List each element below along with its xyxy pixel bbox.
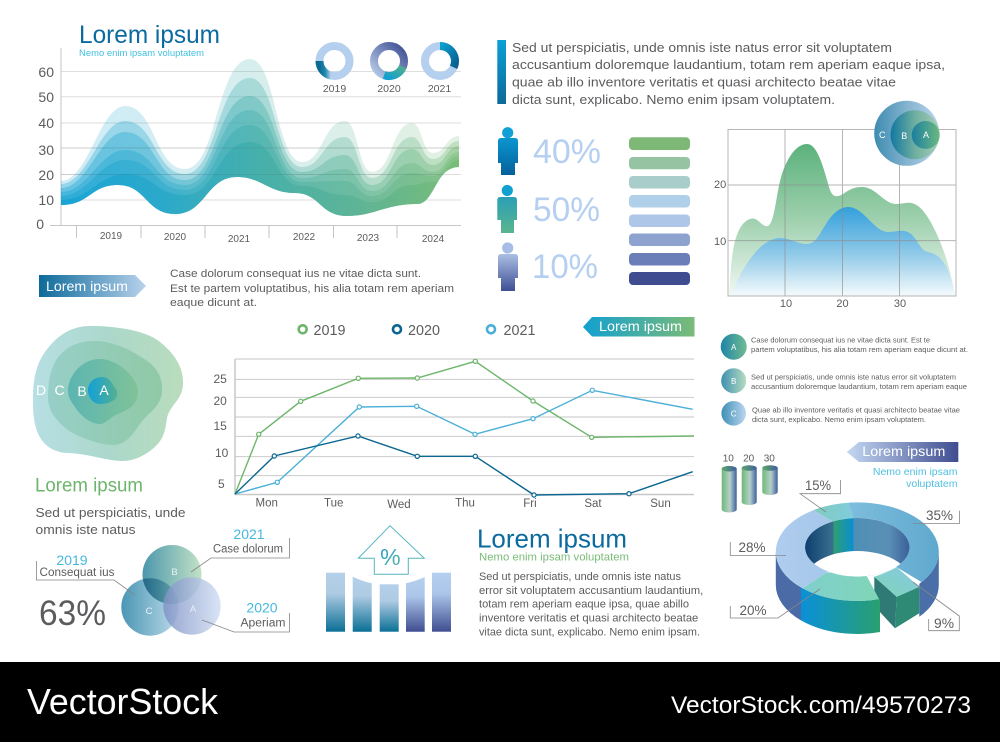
legend: 2021: [504, 323, 536, 339]
panel: line chart: [214, 323, 694, 511]
text block: bottom centre: [477, 523, 703, 639]
donut percent labels: 35%: [926, 507, 953, 523]
donut 2020: 2020: [377, 83, 401, 95]
label 2020: [240, 600, 286, 630]
item B: B: [731, 377, 736, 386]
venn letters: [146, 567, 197, 617]
panel: wave chart: [36, 48, 461, 245]
legend: 2019: [314, 323, 346, 339]
y labels: 20: [214, 394, 227, 408]
item B: accusantium doloremque laudantium, totam rem aperiam eaque: [751, 382, 967, 391]
panel: A B C list: [721, 334, 968, 426]
text block: top right paragraph: quae ab illo inventore veritatis et quasi architecto beatae vitae: [512, 74, 896, 90]
cylinder 30: 30: [764, 454, 775, 465]
arrow tag: middle Lorem ipsum: [583, 317, 694, 336]
text block: top right paragraph: dicta sunt, explicabo. Nemo enim ipsam voluptatem.: [512, 92, 835, 107]
label 2020: 2020: [246, 600, 278, 616]
arrow with percent: %: [380, 544, 401, 570]
label 2019: Consequat ius: [40, 567, 115, 579]
nested circles A B C: C: [879, 130, 886, 140]
ring top segments: [776, 502, 939, 601]
text: right subtitle: voluptatem: [906, 478, 958, 490]
item B: Sed ut perspiciatis, unde omnis iste natus error sit voluptatem: [751, 372, 956, 381]
area chart axis labels: [714, 179, 906, 310]
text block: case dolorum: [170, 268, 454, 309]
text block: case dolorum: Est te partem voluptatibus, his alia totam rem aperiam: [170, 283, 454, 295]
panel: cylinders: [722, 454, 778, 512]
day labels: [256, 498, 671, 511]
item A: partem voluptatibus, his alia totam rem aperiam eaque dicunt at.: [751, 345, 968, 354]
text block: bottom centre: Lorem ipsum: [477, 523, 627, 553]
chart grid and axes: [50, 48, 461, 238]
day labels: Tue: [324, 498, 343, 510]
day labels: Sun: [650, 498, 671, 510]
person 50%: [497, 185, 600, 233]
label 2021: Case dolorum: [213, 544, 283, 556]
donut 2019: 2019: [323, 83, 346, 95]
text block: green heading: Lorem ipsum: [35, 476, 143, 496]
y axis labels: 40: [38, 115, 54, 131]
blue area: [731, 207, 955, 296]
panel: percent bar chart: [326, 526, 451, 632]
area chart axis labels: 20: [714, 179, 726, 191]
blob labels: [36, 382, 109, 399]
text block: top right paragraph: accusantium doloremque laudantium, totam rem aperiam eaque ipsa,: [512, 57, 945, 72]
y axis labels: [36, 64, 54, 232]
segment 9 top: [874, 567, 919, 597]
arrow tag: left Lorem ipsum: Lorem ipsum: [46, 279, 128, 294]
text block: case dolorum: Case dolorum consequat ius ne vitae dicta sunt.: [170, 268, 421, 280]
venn leader lines: [36, 538, 290, 632]
day labels: Fri: [523, 498, 537, 510]
label 2020: Aperiam: [240, 618, 286, 630]
series 2019: [235, 359, 694, 494]
y labels: 5: [218, 477, 225, 491]
donut percent labels: 15%: [805, 477, 831, 493]
venn circles: [121, 545, 221, 636]
segment 9 faces: [874, 577, 919, 628]
text block: top right paragraph: [497, 40, 945, 107]
day labels: Mon: [256, 498, 278, 510]
x axis years: 2022: [293, 232, 316, 243]
person 10%: 10%: [532, 248, 598, 286]
item C: dicta sunt, explicabo. Nemo enim ipsam voluptatem.: [752, 415, 926, 424]
donut percent labels: 28%: [738, 539, 766, 555]
day labels: Thu: [455, 498, 475, 510]
x axis years: [100, 231, 445, 245]
label 2021: [213, 526, 283, 556]
cylinder 10: 10: [723, 454, 734, 465]
item A: Case dolorum consequat ius ne vitae dicta sunt. Est te: [751, 336, 930, 345]
blob level A: [88, 377, 117, 404]
y axis labels: 10: [38, 192, 54, 208]
y labels: [214, 372, 229, 491]
item C: [721, 401, 960, 426]
green area: [729, 144, 955, 296]
panel: venn diagram: [36, 526, 290, 636]
nested circles A B C: B: [901, 131, 907, 141]
outer side right: [919, 552, 939, 617]
nested circles A B C: [874, 101, 940, 166]
blob level D: [33, 326, 183, 461]
y axis labels: 30: [38, 142, 54, 158]
text block: bottom centre: Nemo enim ipsam voluptatem: [479, 552, 629, 564]
y axis labels: 0: [36, 216, 44, 232]
area chart axis labels: 30: [894, 298, 906, 310]
nested circles A B C: A: [923, 130, 929, 140]
item C: C: [731, 410, 737, 418]
x axis years: 2020: [164, 232, 187, 243]
area chart grid: [728, 130, 956, 296]
line chart grid: [235, 359, 694, 476]
blob labels: C: [54, 382, 65, 398]
day labels: Wed: [387, 499, 411, 511]
y axis labels: 20: [38, 167, 54, 183]
blob level B: [68, 359, 138, 424]
heading: top left title: Lorem ipsum: [79, 21, 220, 49]
donut 2021: 2021: [428, 83, 451, 95]
outer side left: [776, 552, 801, 620]
legend: 2020: [408, 323, 440, 339]
item A: [721, 334, 968, 360]
y labels: 25: [214, 372, 227, 386]
donut leader lines: [730, 480, 960, 631]
blob level C: [48, 341, 162, 445]
x axis years: 2024: [422, 234, 445, 245]
footer band: VectorStock: [27, 681, 219, 722]
inner wall: [805, 518, 910, 576]
arrow tag: left Lorem ipsum: [39, 275, 146, 297]
text block: bottom centre: Sed ut perspiciatis, unde omnis iste natus: [479, 571, 681, 583]
y axis labels: 60: [38, 64, 54, 80]
x axis years: 2023: [357, 233, 380, 244]
person 10%: [498, 242, 598, 291]
person 50%: 50%: [533, 191, 600, 229]
heading: top left title: Nemo enim ipsam voluptatem: [79, 48, 204, 59]
colour scale bars: [629, 137, 690, 285]
footer band: [0, 662, 1000, 742]
arrow tag: right Lorem ipsum: [847, 442, 958, 462]
text block: bottom centre: totam rem aperiam eaque ipsa, quae abillo: [479, 599, 689, 611]
panel: people percentages: [497, 127, 601, 291]
person 40%: 40%: [533, 133, 601, 171]
segment 20 front: [801, 587, 880, 634]
text block: top right paragraph: Sed ut perspiciatis, unde omnis iste natus error sit voluptatem: [512, 40, 892, 55]
x axis years: 2021: [228, 234, 251, 245]
text block: green heading: Sed ut perspiciatis, unde: [36, 505, 186, 520]
item A: A: [731, 343, 737, 352]
item C: Quae ab illo inventore veritatis et quasi architecto beatae vitae: [752, 406, 960, 415]
venn letters: C: [146, 606, 153, 617]
label 2019: [40, 552, 115, 579]
text block: green heading: [35, 476, 186, 537]
area chart axis labels: 20: [836, 298, 849, 310]
text block: green heading: omnis iste natus: [36, 522, 136, 537]
y labels: 10: [215, 446, 229, 460]
label 2019: 2019: [56, 552, 88, 568]
y axis labels: 50: [38, 89, 54, 105]
blob labels: B: [77, 383, 87, 399]
blob labels: D: [36, 382, 46, 398]
venn letters: A: [190, 604, 197, 615]
arrow tag: right Lorem ipsum: Lorem ipsum: [862, 444, 945, 459]
donut percent labels: 9%: [934, 615, 954, 631]
text block: bottom centre: inventore veritatis et quasi architecto beatae: [479, 613, 698, 625]
arrow tag: middle Lorem ipsum: Lorem ipsum: [599, 319, 682, 334]
donut charts by year: [319, 46, 455, 95]
donut percent labels: 20%: [740, 602, 766, 618]
big percentage: 63%: [39, 594, 106, 633]
blob labels: A: [99, 382, 109, 398]
legend: [299, 323, 536, 339]
panel: 3D donut chart: [730, 477, 960, 634]
text: right subtitle: Nemo enim ipsam: [873, 466, 958, 478]
x axis years: 2019: [100, 231, 123, 242]
label 2021: 2021: [233, 526, 265, 542]
bars: [326, 573, 451, 632]
cylinder 20: 20: [743, 454, 755, 465]
area chart axis labels: 10: [780, 298, 792, 310]
person 40%: [498, 127, 601, 175]
panel: area chart: [714, 101, 956, 310]
stacked wave area: [61, 59, 459, 216]
day labels: Sat: [584, 498, 602, 510]
y labels: 15: [214, 419, 227, 433]
donut percent labels: [738, 477, 954, 631]
panel: contour blob: [33, 326, 183, 461]
footer band: VectorStock.com/49570273: [671, 692, 971, 719]
item B: [721, 368, 967, 393]
text block: bottom centre: error sit voluptatem accusantium laudantium,: [479, 585, 703, 597]
text block: case dolorum: eaque dicunt at.: [170, 297, 257, 309]
text: right subtitle: [873, 466, 958, 490]
series 2021: [235, 388, 693, 494]
area chart axis labels: 10: [714, 236, 726, 248]
venn letters: B: [171, 567, 178, 578]
text block: bottom centre: vitae dicta sunt, explicabo. Nemo enim ipsam.: [479, 627, 700, 639]
series 2020: [235, 434, 693, 497]
